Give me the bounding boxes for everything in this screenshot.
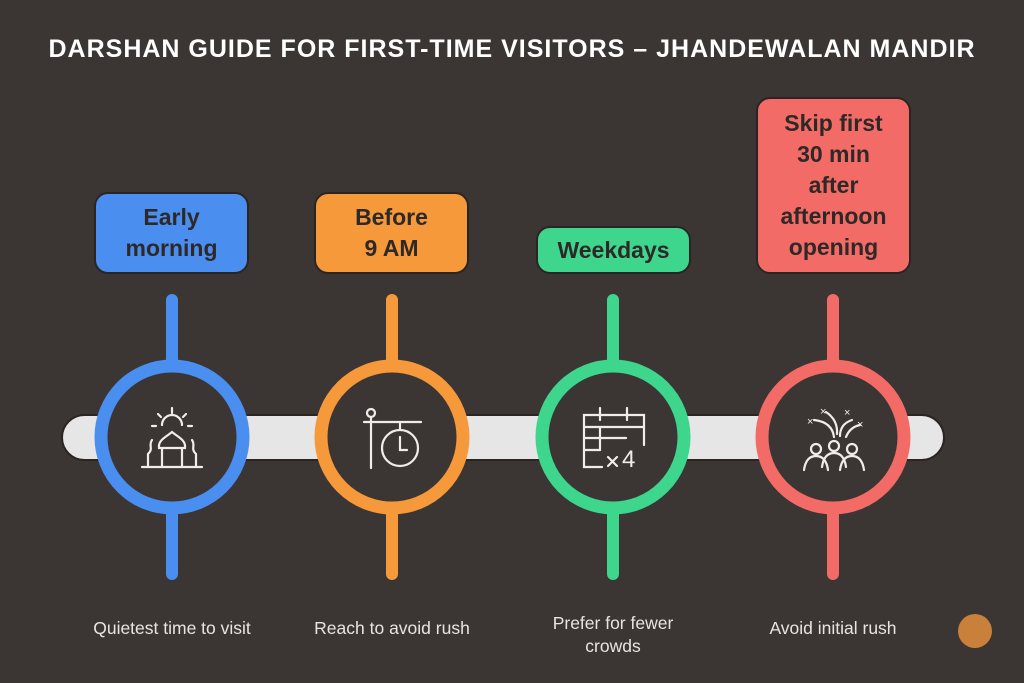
label box: weekdays: Weekdays [557, 236, 670, 262]
caption 2: Reach to avoid rush [314, 618, 470, 638]
label box: before 9 AM: Before [355, 204, 428, 230]
label box: skip first 30 min: after [809, 172, 858, 198]
title: DARSHAN GUIDE FOR FIRST-TIME VISITORS – JHANDEWALAN MANDIR [48, 35, 976, 63]
label box: early morning: Early [143, 204, 200, 230]
label box: weekdays [536, 226, 691, 274]
icon: calendar x4 [584, 408, 644, 473]
label box: before 9 AM: 9 AM [364, 235, 419, 261]
step 4 connector and ring [762, 300, 904, 574]
label box: skip first 30 min: opening [789, 234, 878, 260]
label box: skip first 30 min [756, 97, 911, 274]
label box: skip first 30 min: 30 min [797, 141, 870, 167]
caption 3: Prefer for fewer crowds [553, 613, 673, 656]
icon: temple with sun [142, 408, 202, 467]
caption 4: Avoid initial rush [769, 618, 897, 638]
timeline bar [62, 415, 944, 460]
icon: crowd with fireworks: × [857, 419, 863, 431]
logo [958, 614, 992, 648]
icon: sign with clock [364, 409, 421, 468]
step 2 connector and ring [321, 300, 463, 574]
icon: crowd with fireworks: × [844, 407, 850, 419]
step 3 connector and ring [542, 300, 684, 574]
label box: early morning [94, 192, 249, 274]
label box: skip first 30 min: Skip first [784, 110, 883, 136]
icon: crowd with fireworks: × [807, 416, 813, 428]
icon: calendar x4: 4 [622, 446, 635, 473]
caption 1: Quietest time to visit [93, 618, 251, 638]
label box: before 9 AM [314, 192, 469, 274]
label box: skip first 30 min: afternoon [780, 203, 887, 229]
icon: crowd with fireworks: × [820, 406, 826, 418]
step 1 connector and ring [101, 300, 243, 574]
label box: early morning: morning [126, 235, 218, 261]
icon: crowd with fireworks [804, 406, 864, 470]
